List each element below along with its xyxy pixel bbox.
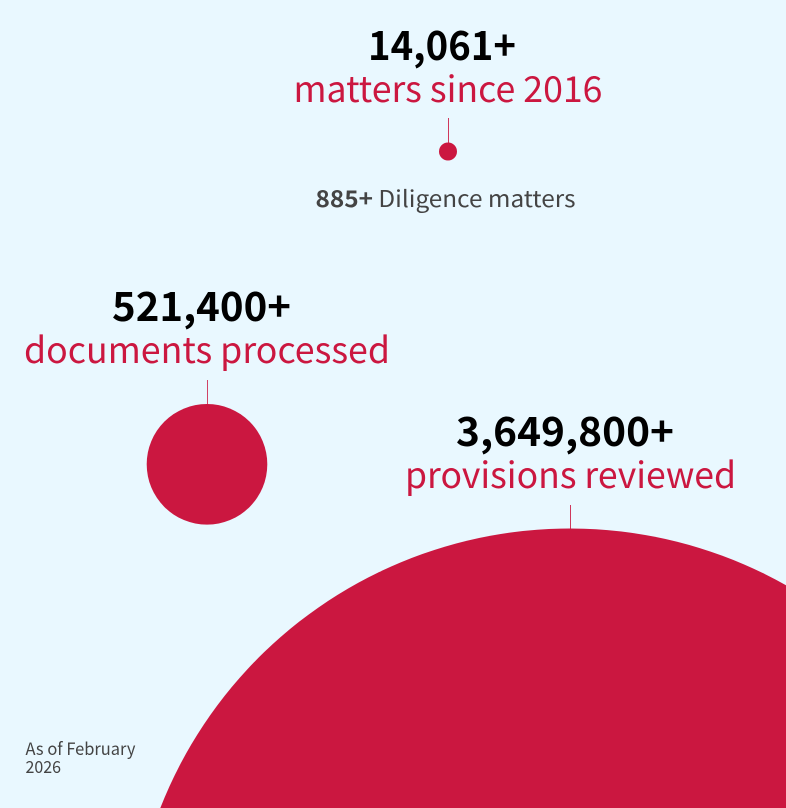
- stat: matters: [294, 14, 602, 113]
- footnote: date: [26, 735, 136, 778]
- small circle: matters: [439, 142, 457, 160]
- stat: documents: 521,400+: [112, 275, 291, 333]
- stat: provisions: [405, 400, 736, 499]
- connector: matters: [448, 118, 450, 143]
- connector: provisions: [570, 505, 572, 529]
- stat: documents: [24, 275, 390, 374]
- footnote: date: 2026: [26, 753, 61, 778]
- big circle: provisions: [160, 529, 786, 808]
- stat: matters: matters since 2016: [294, 61, 602, 113]
- connector: documents: [206, 380, 208, 404]
- footnote: date: As of February: [26, 735, 136, 760]
- stat: provisions: provisions reviewed: [405, 447, 736, 499]
- stat: documents: documents processed: [24, 322, 390, 374]
- stat: matters: 14,061+: [368, 14, 516, 72]
- stat: provisions: 3,649,800+: [456, 400, 674, 458]
- medium circle: documents: [147, 404, 267, 525]
- sub-stat: diligence matters: 885+ Diligence matters: [316, 180, 576, 214]
